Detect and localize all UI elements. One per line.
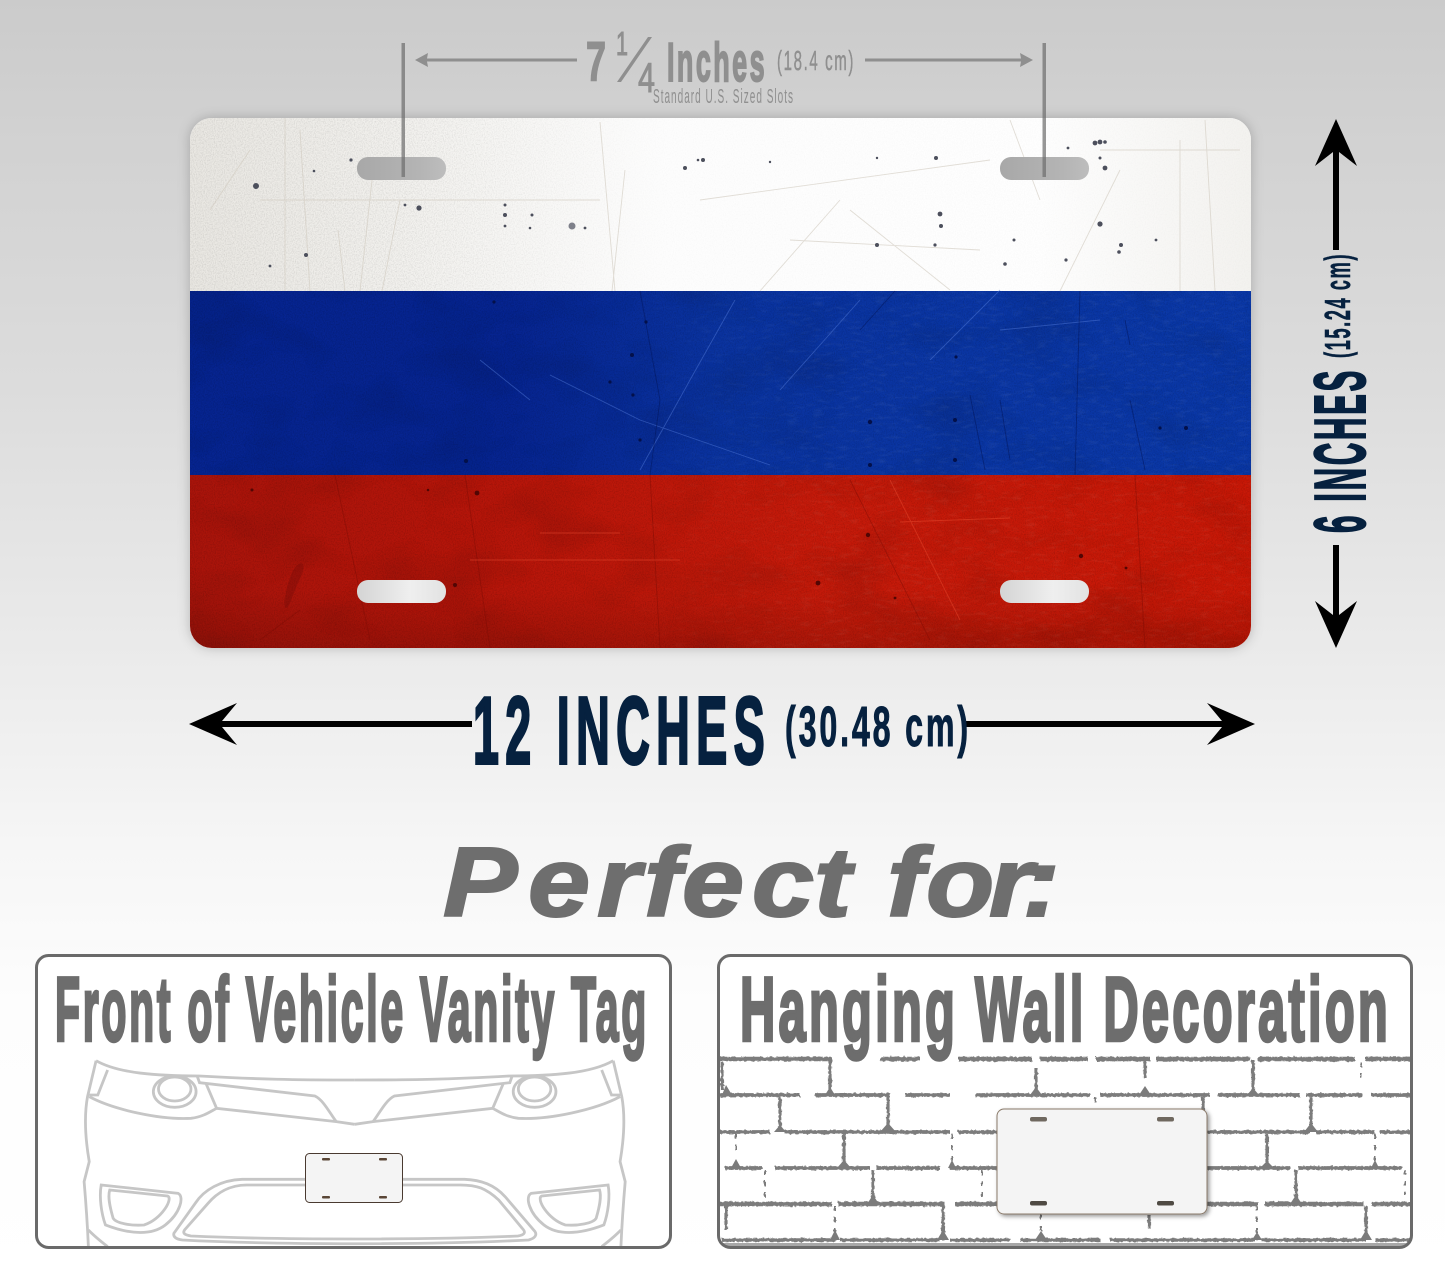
panel: front of vehicle (36, 956, 670, 1248)
label: 15.24 cm: (15.24 cm) (1317, 253, 1358, 358)
arrow: right (966, 703, 1255, 745)
label: 7 1/4 Inches: Inches (667, 31, 767, 93)
label: 30.48 cm: (30.48 cm) (785, 695, 971, 759)
label: 7 1/4 Inches (586, 25, 855, 101)
mortar peaks (722, 1085, 1379, 1240)
red stripe (190, 475, 1251, 648)
arrow: down (1315, 545, 1357, 648)
scratches on the metal (210, 118, 1240, 648)
arrow: left (189, 703, 472, 745)
width dimension (189, 678, 1255, 784)
text: Front of Vehicle Vanity Tag (55, 960, 649, 1060)
label: 7 1/4 Inches: 1 (616, 25, 628, 62)
arrow: left (415, 53, 577, 67)
bottom-right slot (1000, 580, 1089, 603)
arrow: right (865, 53, 1033, 67)
blue stripe (190, 291, 1251, 475)
car outline drawing (84, 1061, 625, 1247)
label: 7 1/4 Inches: 4 (638, 54, 655, 101)
arrow: up (1315, 119, 1357, 250)
brick wall (719, 1059, 1411, 1247)
panel border (36, 956, 670, 1248)
mini plate on wall (997, 1109, 1207, 1214)
specks (253, 140, 1157, 267)
label: 7 1/4 Inches: 7 (586, 30, 606, 92)
heading: Perfect for: Perfect for: (443, 828, 1060, 937)
label: standard slots: Standard U.S. Sized Slots (653, 86, 794, 108)
height dimension: 6 INCHES (1301, 368, 1381, 533)
top-right slot (1000, 157, 1089, 180)
panel: wall decoration (718, 956, 1412, 1248)
stain (284, 563, 303, 608)
left bracket line (402, 43, 405, 177)
license plate: Russian flag (190, 118, 1251, 648)
mini plate on car (306, 1154, 402, 1202)
slot spacing dimension (402, 25, 1046, 177)
width dimension: 12 INCHES (473, 678, 771, 784)
bottom-left slot (357, 580, 446, 603)
label: 7 1/4 Inches: (18.4 cm) (777, 45, 855, 76)
right bracket line (1042, 43, 1046, 177)
panel border (718, 956, 1412, 1248)
top-left slot (357, 157, 446, 180)
white stripe (190, 118, 1251, 291)
